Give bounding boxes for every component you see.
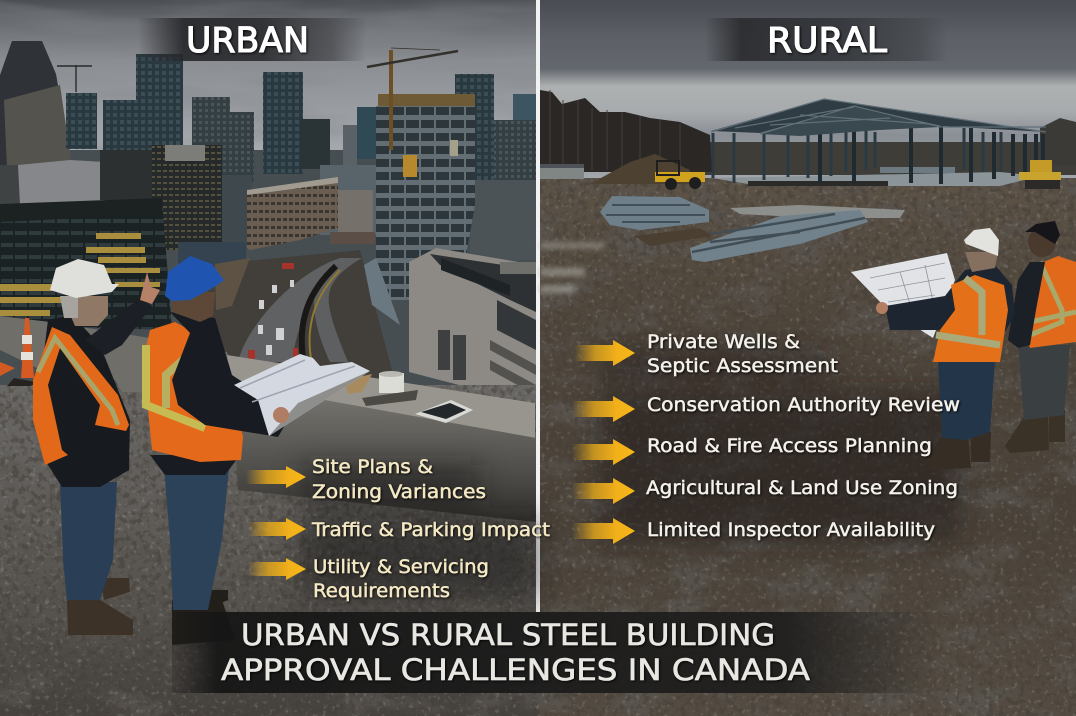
head <box>172 292 215 322</box>
arrow: road <box>572 439 635 465</box>
hand <box>140 272 160 304</box>
arrow: inspector <box>572 518 635 544</box>
small site shed <box>540 164 584 179</box>
boots <box>172 590 235 645</box>
label: private wells and septic assessment: Septic Assessment <box>647 355 838 377</box>
arrow: utility <box>248 558 306 580</box>
label: utility and servicing requirements: Utility & Servicing <box>313 556 489 578</box>
heading band: RURAL <box>705 18 948 61</box>
ground light speckle <box>540 178 1076 716</box>
white helmet <box>50 259 119 298</box>
jeans <box>938 360 995 440</box>
boots <box>1005 410 1065 453</box>
arrow: wells <box>574 340 635 366</box>
head <box>965 252 998 272</box>
shadow behind urban labels <box>300 465 540 600</box>
worker 2: blue hard hat, holding blueprints <box>143 256 288 645</box>
label: road and fire access planning: Road & Fire Access Planning <box>647 435 932 457</box>
label: private wells and septic assessment: Private Wells & <box>647 331 800 353</box>
heading band: URBAN <box>138 18 366 61</box>
jeans <box>60 482 117 600</box>
yellow excavator <box>1019 160 1061 189</box>
city skyline towers <box>0 41 536 260</box>
clouds over city <box>0 0 536 150</box>
title: URBAN VS RURAL STEEL BUILDING <box>241 618 775 652</box>
label: utility and servicing requirements: Requirements <box>313 580 450 602</box>
ground light speckle <box>0 385 540 716</box>
hand on plans <box>273 407 289 423</box>
highway and traffic <box>205 250 400 400</box>
stacked steel beams pile 2 <box>690 210 868 262</box>
parapet front face <box>232 392 536 522</box>
black cap <box>1025 221 1060 244</box>
rooftop items: mug, clipboard, tablet <box>345 371 473 423</box>
back parapet <box>0 316 240 395</box>
raised arm <box>85 298 152 355</box>
jacket sleeve <box>170 312 288 437</box>
worker 4: rural worker in white hard hat <box>876 228 1015 470</box>
hand <box>876 302 888 314</box>
city base mass <box>0 150 536 400</box>
arrow: traffic <box>248 518 306 540</box>
rooftop ground <box>0 385 540 716</box>
white helmet <box>964 228 999 256</box>
ground blotches <box>540 178 1076 716</box>
vest <box>1024 256 1076 348</box>
worker 3: rural far worker in cap <box>1005 221 1076 453</box>
dark shadow behind rural labels <box>600 350 960 542</box>
worker 1: white hard hat, pointing <box>33 259 160 635</box>
trousers <box>1018 345 1070 420</box>
divider <box>536 0 540 612</box>
concrete office building <box>409 248 536 405</box>
traffic cone <box>0 318 36 386</box>
heading: URBAN: URBAN <box>186 21 309 61</box>
arrow: site plans <box>246 466 306 488</box>
jacket and arm <box>885 265 1015 340</box>
stacked steel beams pile 1 <box>600 196 712 246</box>
list: rural approval challenges <box>572 331 960 544</box>
dirt mounds <box>590 154 690 184</box>
steel building frame <box>711 99 1046 184</box>
vest <box>143 322 243 462</box>
ground blotches <box>0 385 540 716</box>
title band <box>172 612 937 693</box>
overcast rural sky <box>540 0 1076 180</box>
muddy site ground <box>540 178 1076 716</box>
jacket arm <box>1008 262 1045 348</box>
ground grit <box>0 385 540 716</box>
title: APPROVAL CHALLENGES IN CANADA <box>221 653 810 687</box>
jacket lower <box>150 455 240 475</box>
sky: overcast city sky <box>0 0 536 200</box>
yellow wheel loader <box>655 161 705 190</box>
label: site plans and zoning variances: Zoning Variances <box>312 481 486 503</box>
rolled blueprints <box>234 354 370 436</box>
blue helmet <box>165 256 224 301</box>
label: site plans and zoning variances: Site Plans & <box>312 456 433 478</box>
label: conservation authority review: Conservation Authority Review <box>647 394 960 416</box>
boots <box>67 578 133 635</box>
head <box>62 296 108 326</box>
jacket <box>38 315 130 487</box>
label: traffic and parking impact: Traffic & Parking Impact <box>311 519 550 541</box>
arrow: agricultural <box>572 478 635 504</box>
list: urban approval challenges <box>246 456 550 602</box>
parapet top slab <box>227 355 535 438</box>
small crane <box>57 65 92 92</box>
heading: RURAL: RURAL <box>767 21 888 61</box>
wet pale patches <box>540 243 605 293</box>
jeans <box>164 468 229 610</box>
label: agricultural and land use zoning: Agricultural & Land Use Zoning <box>646 477 958 499</box>
ground grit <box>540 178 1076 716</box>
vest <box>33 327 129 465</box>
vest <box>933 275 1008 362</box>
construction tower with crane <box>364 48 475 325</box>
rolled-out blueprint <box>851 253 955 338</box>
rural upper cloud shade <box>540 0 1076 80</box>
puddle and slab <box>712 167 1040 218</box>
dark glass office with lit windows <box>0 198 246 330</box>
head <box>1028 227 1056 257</box>
mid-rise city blocks <box>0 145 375 250</box>
boots <box>927 432 991 470</box>
arrow: conservation <box>572 396 635 422</box>
distant tree line <box>540 90 1076 175</box>
label: limited inspector availability: Limited Inspector Availability <box>647 519 935 541</box>
panel: urban scene <box>0 0 540 716</box>
panel: rural scene <box>540 0 1076 716</box>
